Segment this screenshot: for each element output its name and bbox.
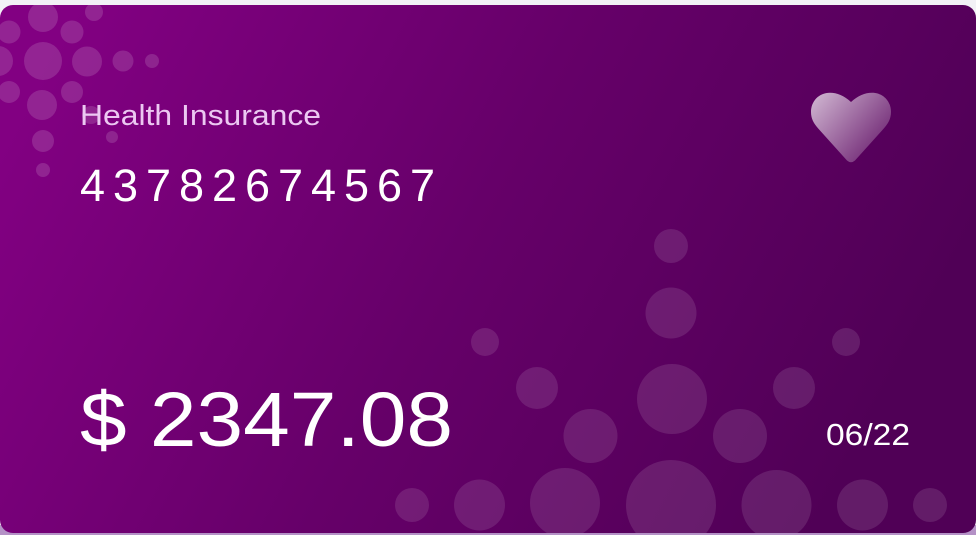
amount: $ 2347.08	[80, 377, 453, 463]
card number: 43782674567	[80, 160, 435, 211]
icon: heart	[811, 93, 891, 162]
heading: Health Insurance: Health Insurance	[80, 100, 321, 132]
expiry date: 06/22	[826, 417, 910, 452]
decorative circles: bottom right	[395, 229, 947, 535]
decorative circles: top left	[0, 2, 159, 177]
